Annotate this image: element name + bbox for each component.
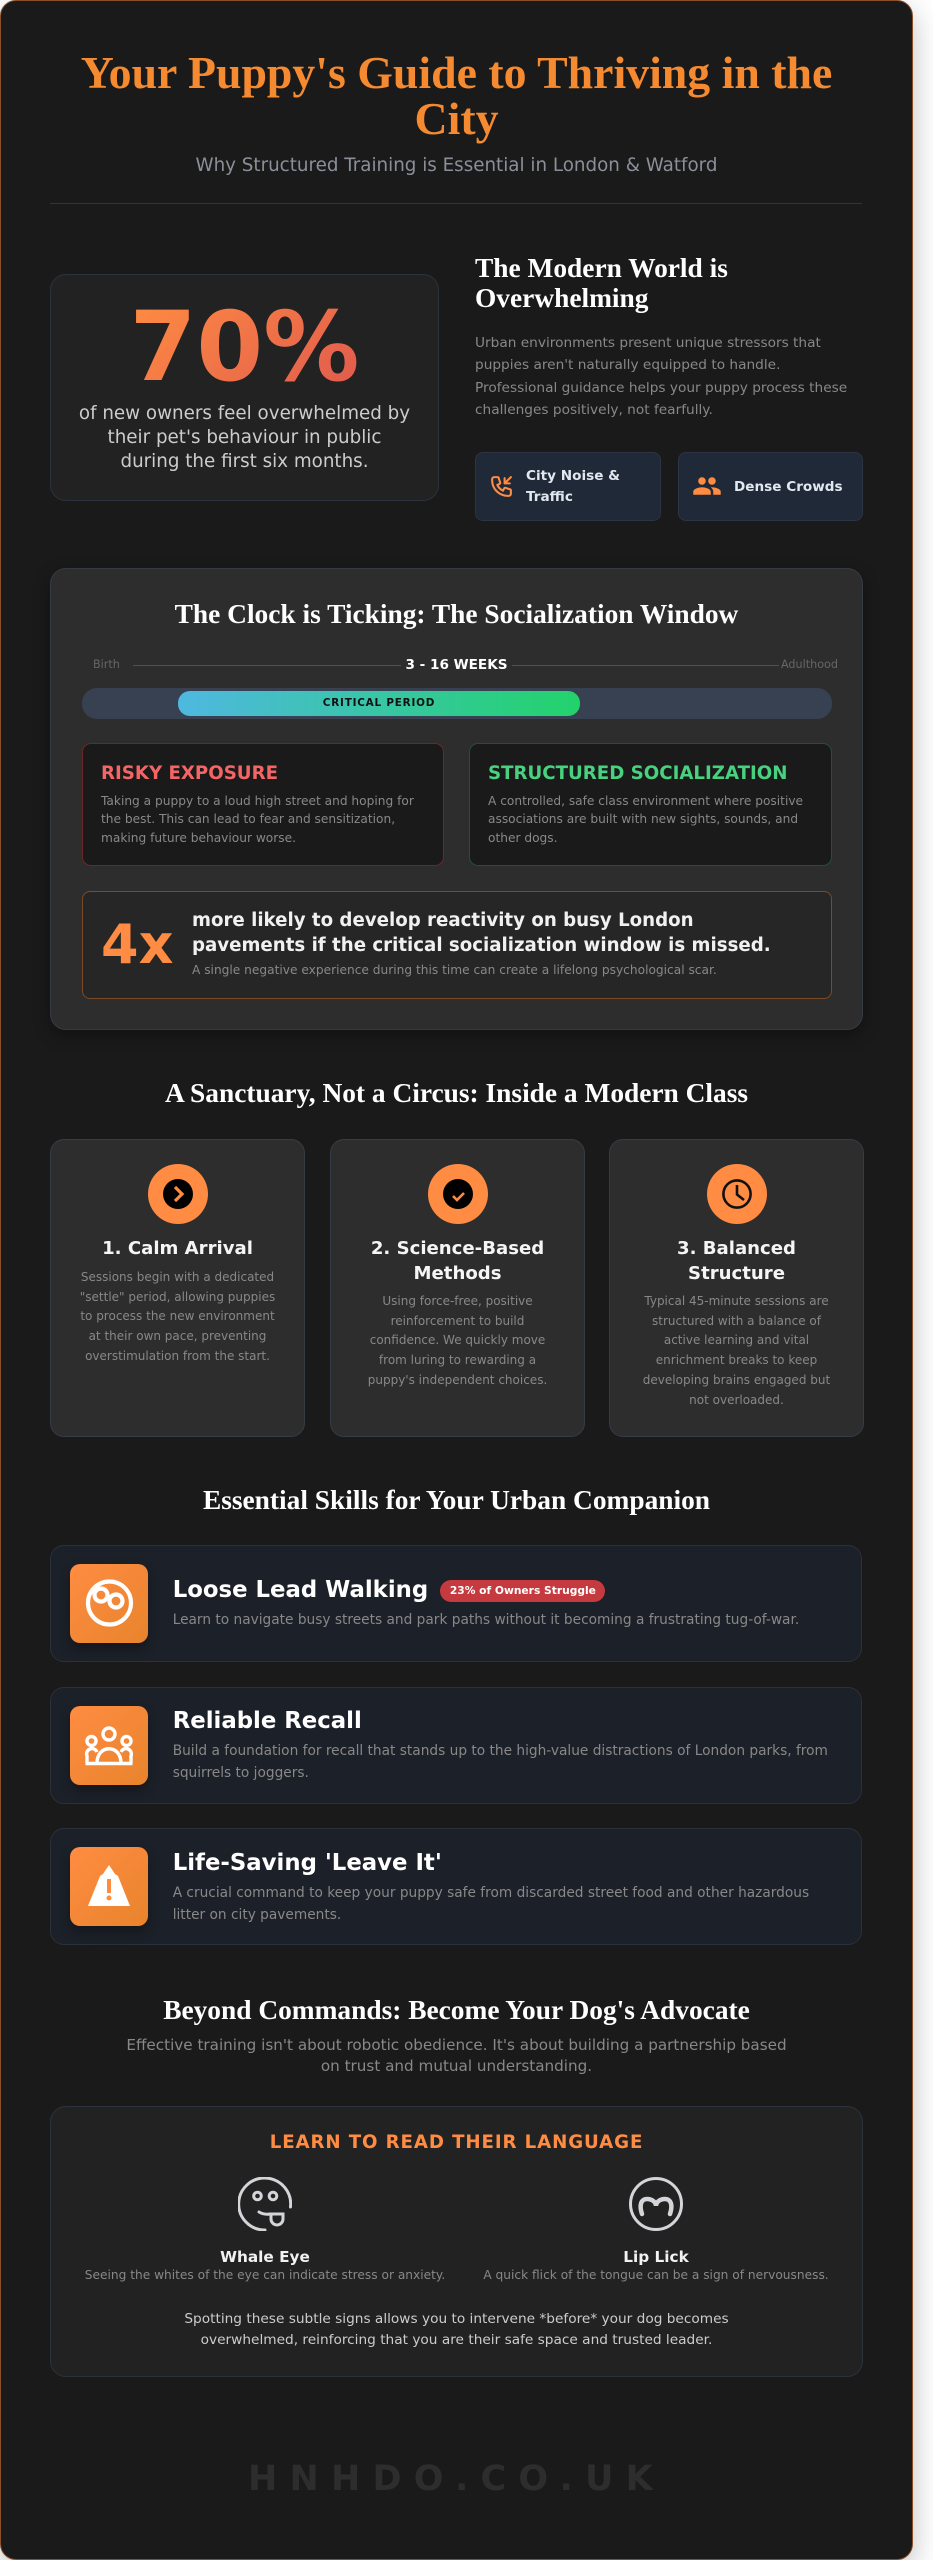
card heading: STRUCTURED SOCIALIZATION: [488, 763, 787, 784]
step text: [643, 1294, 830, 1407]
step title: 3. Balanced: [677, 1238, 796, 1259]
title: City: [415, 93, 498, 144]
card text: [488, 794, 803, 845]
skill title: Life-Saving 'Leave It': [173, 1850, 442, 1876]
statistic caption: of new owners feel overwhelmed by: [79, 403, 410, 424]
panel closing text: Spotting these subtle signs allows you to intervene *before* your dog becomes: [184, 2311, 729, 2327]
icon: warning triangle: [70, 1847, 148, 1926]
advocate intro text: Effective training isn't about robotic obedience. It's about building a partnership based: [126, 2036, 787, 2054]
step text: confidence. We quickly move: [370, 1333, 545, 1347]
step card 1: [50, 1139, 305, 1437]
step text: enrichment breaks to keep: [656, 1353, 817, 1367]
icon: lead ring: [70, 1564, 148, 1643]
watermark: HNHDO.CO.UK: [248, 2459, 665, 2499]
icon: check: [428, 1164, 488, 1224]
icon: clock: [706, 1164, 766, 1224]
skill text: litter on city pavements.: [173, 1907, 341, 1923]
card text: [100, 794, 414, 845]
card text: Taking a puppy to a loud high street and hoping for: [101, 794, 414, 808]
skill card: recall: [50, 1687, 862, 1804]
badge: 23%: 23% of Owners Struggle: [450, 1584, 596, 1597]
callout text: [192, 910, 771, 956]
step title: Structure: [688, 1262, 785, 1284]
label: birth: Birth: [93, 658, 120, 671]
sign description: Seeing the whites of the eye can indicate stress or anxiety.: [85, 2268, 445, 2282]
icon: phone: [491, 476, 512, 497]
step card 3: [609, 1139, 864, 1437]
skill text: Build a foundation for recall that stands up to the high-value distractions of London parks, from: [173, 1743, 828, 1759]
sign name: Lip Lick: [623, 2248, 689, 2266]
statistic caption: during the first six months.: [120, 451, 369, 472]
chip: dense crowds: [678, 452, 863, 521]
callout text: more likely to develop reactivity on busy London: [192, 910, 694, 931]
panel heading: LEARN TO READ THEIR LANGUAGE: [270, 2132, 643, 2153]
step text: from luring to rewarding a: [379, 1353, 536, 1367]
heading: The Modern World: [475, 253, 728, 313]
step card 2: [330, 1139, 585, 1437]
step title: [371, 1238, 544, 1284]
step text: structured with a balance of: [652, 1314, 821, 1328]
step text: to process the new environment: [80, 1309, 275, 1323]
label: 3 - 16 weeks: 3 - 16 WEEKS: [405, 657, 508, 673]
step text: at their own pace, preventing: [89, 1329, 266, 1343]
step text: puppy's independent choices.: [368, 1373, 547, 1387]
step text: Using force-free, positive: [382, 1294, 533, 1308]
title: Your Puppy's Guide to Thriving in the: [81, 47, 832, 98]
sign: whale eye: [85, 2177, 445, 2282]
chip label: Traffic: [526, 489, 573, 505]
card text: associations are built with new sights, sounds, and: [488, 812, 798, 826]
step text: reinforcement to build: [391, 1314, 524, 1328]
step text: [368, 1294, 547, 1387]
title: [81, 47, 832, 144]
step text: not overloaded.: [689, 1393, 784, 1407]
step title: 1. Calm Arrival: [102, 1238, 253, 1259]
chip: city noise: [475, 452, 661, 521]
card text: other dogs.: [488, 831, 558, 845]
skill title: Loose Lead Walking: [173, 1577, 428, 1603]
statistic caption: [79, 403, 410, 472]
heading: The Modern World: Overwhelming: [475, 283, 648, 313]
skill title: Reliable Recall: [173, 1708, 362, 1734]
step text: Sessions begin with a dedicated: [81, 1270, 274, 1284]
icon: lip lick face: [629, 2177, 683, 2231]
skill text: [172, 1885, 809, 1923]
big number 70%: 70%: [130, 291, 359, 403]
icon: chevron: [148, 1164, 208, 1224]
panel closing text: overwhelmed, reinforcing that you are their safe space and trusted leader.: [201, 2332, 712, 2348]
step title: 2. Science-Based: [371, 1238, 544, 1259]
skill text: A crucial command to keep your puppy safe from discarded street food and other hazardous: [173, 1885, 809, 1901]
step text: active learning and vital: [664, 1333, 809, 1347]
heading: essential skills: Essential Skills for Your Urban Companion: [203, 1485, 710, 1515]
panel closing text: [184, 2311, 729, 2348]
step text: [80, 1270, 275, 1363]
skill text: squirrels to joggers.: [173, 1765, 309, 1781]
advocate intro text: on trust and mutual understanding.: [321, 2057, 592, 2075]
statistic caption: their pet's behaviour in public: [108, 427, 381, 448]
timeline bar: [82, 688, 832, 719]
step text: developing brains engaged but: [643, 1373, 830, 1387]
timeline labels: [93, 657, 838, 673]
critical period segment: [178, 691, 580, 716]
card text: the best. This can lead to fear and sensitization,: [101, 812, 395, 826]
badge: 23%: [440, 1580, 605, 1602]
chip label: City Noise &: [526, 468, 620, 484]
step text: Typical 45-minute sessions are: [644, 1294, 829, 1308]
callout number: 4x: [101, 913, 173, 976]
panel: socialization window: [50, 568, 863, 1030]
icon: group: [70, 1706, 148, 1785]
card heading: RISKY EXPOSURE: [101, 763, 278, 784]
step title: [677, 1238, 796, 1284]
paragraph: urban stressors: puppies aren't naturally equipped to handle.: [475, 357, 780, 373]
sign name: Whale Eye: [220, 2248, 310, 2266]
paragraph: urban stressors: Professional guidance helps your puppy process these: [475, 380, 847, 396]
step text: "settle" period, allowing puppies: [80, 1290, 275, 1304]
header divider: [50, 203, 862, 204]
advocate intro text: [126, 2036, 787, 2075]
skill text: Learn to navigate busy streets and park paths without it becoming a frustrating tug-of-war.: [173, 1612, 799, 1628]
sign description: A quick flick of the tongue can be a sign of nervousness.: [483, 2268, 829, 2282]
icon: whale eye face: [238, 2177, 292, 2231]
skill card: loose lead: [50, 1545, 862, 1662]
callout text: pavements if the critical socialization window is missed.: [192, 934, 771, 956]
label: adulthood: Adulthood: [781, 658, 838, 671]
card text: making future behaviour worse.: [101, 831, 296, 845]
skill card: leave it: [50, 1828, 862, 1945]
paragraph: urban stressors: Urban environments present unique stressors that: [475, 335, 821, 351]
step title: Methods: [414, 1262, 501, 1284]
step text: overstimulation from the start.: [85, 1349, 270, 1363]
callout: 4x: [82, 891, 832, 999]
sign: lip lick: [483, 2177, 829, 2282]
card: risky exposure: [82, 743, 444, 866]
chip label: Dense Crowds: [734, 479, 843, 495]
icon: people: [693, 477, 721, 495]
card: structured socialization: [469, 743, 832, 866]
callout subtext: A single negative experience during this time can create a lifelong psychological scar.: [192, 963, 717, 977]
paragraph: urban stressors: [475, 335, 847, 418]
heading: The Modern World: The Modern World is: [475, 253, 728, 283]
skill text: [173, 1743, 828, 1781]
panel: body language: [50, 2106, 863, 2377]
heading: advocate: Beyond Commands: Become Your Dog's Advocate: [163, 1995, 750, 2025]
paragraph: urban stressors: challenges positively, not fearfully.: [475, 402, 713, 418]
chip label: [526, 468, 620, 505]
panel heading: The Clock is Ticking: The Socialization Window: [175, 599, 738, 629]
panel: 70% statistic: [50, 274, 439, 501]
critical period segment: CRITICAL PERIOD: [323, 697, 435, 709]
card text: A controlled, safe class environment where positive: [488, 794, 803, 808]
heading: sanctuary: A Sanctuary, Not a Circus: Inside a Modern Class: [165, 1078, 748, 1108]
subtitle: Why Structured Training is Essential in London & Watford: [196, 155, 717, 176]
